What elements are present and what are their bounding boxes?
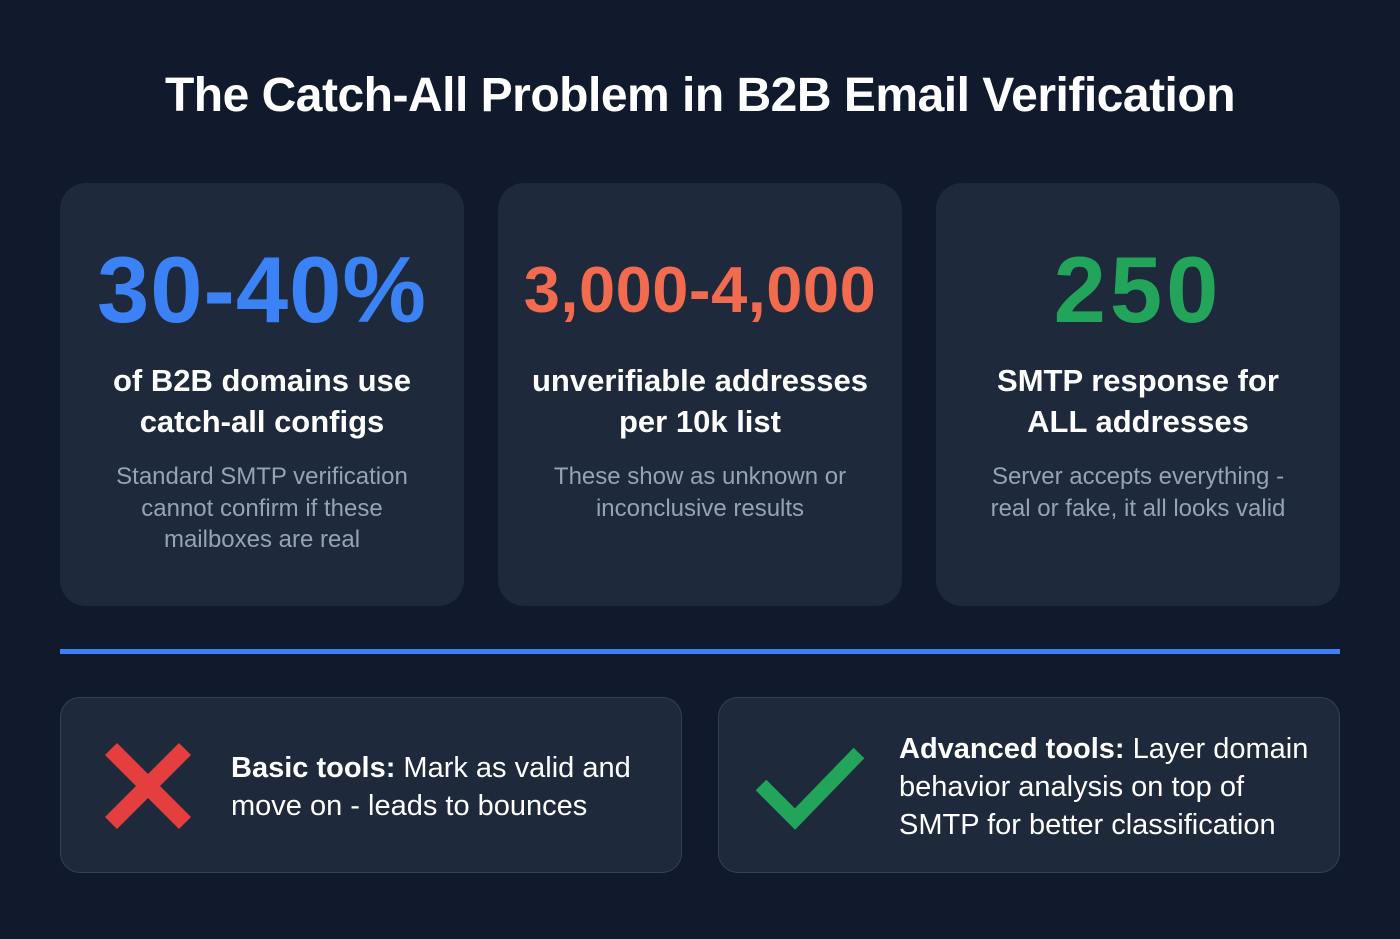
panel 3 subtitle (997, 363, 1279, 439)
panel 3 description (991, 463, 1285, 522)
stat: 250: 250 (1054, 237, 1222, 342)
text: advanced tools: SMTP for better classification (899, 809, 1276, 841)
panel 2 subtitle: per 10k list (619, 404, 781, 439)
text: basic tools: move on - leads to bounces (231, 790, 587, 822)
stat: 3,000-4,000: 3,000-4,000 (524, 253, 876, 326)
panel 2 subtitle: unverifiable addresses (532, 363, 868, 398)
panel 1 subtitle: catch-all configs (140, 404, 384, 439)
stat: 30-40%: 30-40% (97, 237, 427, 342)
panel: advanced tools (718, 697, 1340, 873)
panel 3 description: Server accepts everything - (992, 463, 1284, 490)
icon: green check (756, 748, 864, 830)
panel 2 description: These show as unknown or (554, 463, 846, 490)
text: advanced tools: Advanced tools: Layer domain (899, 733, 1308, 765)
icon: red X (105, 743, 191, 829)
text: advanced tools: behavior analysis on top of (899, 771, 1244, 803)
text: advanced tools (899, 733, 1308, 841)
panel: basic tools (60, 697, 682, 873)
title: The Catch-All Problem in B2B Email Verification (165, 69, 1235, 122)
text: basic tools: Basic tools: Mark as valid and (231, 752, 631, 784)
panel 3 subtitle: ALL addresses (1027, 404, 1249, 439)
panel: 3,000-4,000 (498, 183, 902, 606)
panel 3 description: real or fake, it all looks valid (991, 494, 1285, 522)
panel: 30-40% (60, 183, 464, 606)
panel 2 description: inconclusive results (596, 494, 804, 522)
panel 1 description: cannot confirm if these (141, 494, 383, 522)
panel 1 subtitle (113, 363, 411, 439)
panel: 250 (936, 183, 1340, 606)
panel 1 subtitle: of B2B domains use (113, 363, 411, 398)
panel 1 description: mailboxes are real (164, 526, 360, 553)
panel 1 description (116, 463, 408, 553)
text: basic tools (231, 752, 631, 822)
panel 3 subtitle: SMTP response for (997, 363, 1279, 398)
panel 2 description (554, 463, 846, 522)
panel 1 description: Standard SMTP verification (116, 463, 408, 490)
panel 2 subtitle (532, 363, 868, 439)
